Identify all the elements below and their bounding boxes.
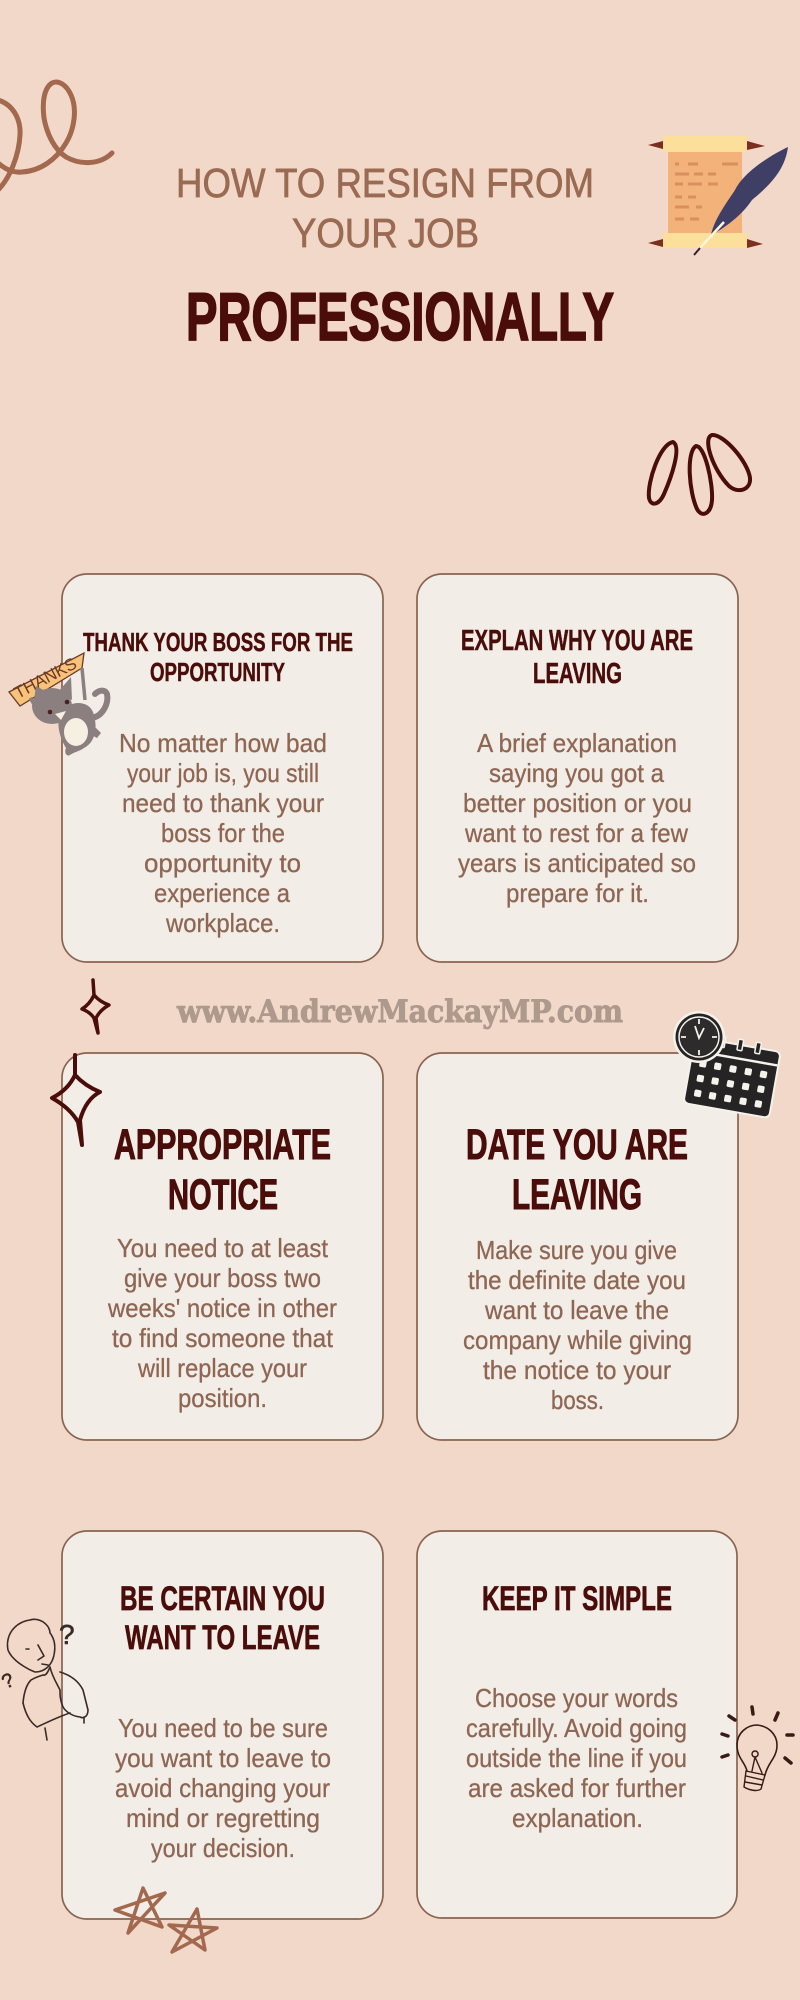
decorative small sparkle <box>82 980 109 1033</box>
body text: be certain <box>115 1713 331 1863</box>
title: HOW TO RESIGN FROM <box>176 160 594 206</box>
body text: keep it simple: are asked for further <box>468 1773 686 1803</box>
body text: keep it simple: explanation. <box>512 1803 643 1833</box>
body text: appropriate notice: You need to at least <box>117 1233 329 1263</box>
icon: cat holding thanks banner <box>9 653 107 755</box>
body text: thank your boss: experience a <box>154 878 290 908</box>
icon: clock and calendar <box>673 1011 783 1119</box>
decorative large sparkle <box>52 1055 100 1145</box>
body text: thank your boss: your job is, you still <box>127 758 319 788</box>
body text: date you are leaving: boss. <box>551 1385 604 1415</box>
body text: appropriate notice: give your boss two <box>124 1263 321 1293</box>
heading: thank your boss <box>83 627 353 687</box>
body text: appropriate notice: position. <box>178 1383 267 1413</box>
body text: be certain: You need to be sure <box>118 1713 328 1743</box>
heading: appropriate notice <box>114 1121 331 1219</box>
title emphasis: professionally: PROFESSIONALLY <box>186 279 614 355</box>
heading: appropriate notice: NOTICE <box>168 1171 278 1219</box>
panel: keep it simple <box>417 1531 737 1918</box>
decorative squiggle top left <box>0 82 112 190</box>
heading: thank your boss: THANK YOUR BOSS FOR THE <box>83 627 353 657</box>
panel: be certain you want to leave <box>62 1531 383 1919</box>
body text: be certain: avoid changing your <box>115 1773 330 1803</box>
icon: thinking man with question marks: ? <box>59 1619 75 1650</box>
body text: thank your boss: No matter how bad <box>119 728 327 758</box>
body text: appropriate notice: will replace your <box>137 1353 307 1383</box>
body text: keep it simple: carefully. Avoid going <box>466 1713 687 1743</box>
heading: explain why: LEAVING <box>533 658 622 690</box>
body text: explain why: better position or you <box>463 788 692 818</box>
icon: cat holding thanks banner: THANKS <box>11 654 80 703</box>
heading: appropriate notice: APPROPRIATE <box>114 1121 331 1169</box>
heading: explain why: EXPLAN WHY YOU ARE <box>461 625 693 657</box>
body text: thank your boss: workplace. <box>165 908 280 938</box>
body text: date you are leaving: the notice to your <box>483 1355 671 1385</box>
heading: explain why <box>461 625 693 690</box>
heading: be certain: WANT TO LEAVE <box>125 1619 320 1657</box>
body text: explain why: saying you got a <box>489 758 664 788</box>
body text: be certain: mind or regretting <box>126 1803 320 1833</box>
body text: explain why: A brief explanation <box>477 728 677 758</box>
title: YOUR JOB <box>292 210 479 256</box>
heading: be certain <box>120 1580 325 1657</box>
panel: explain why you are leaving <box>417 574 738 962</box>
body text: be certain: you want to leave to <box>115 1743 331 1773</box>
panel: appropriate notice <box>62 1053 383 1440</box>
icon: scroll and feather quill <box>648 136 788 255</box>
body text: keep it simple: outside the line if you <box>466 1743 687 1773</box>
heading: keep it simple: KEEP IT SIMPLE <box>482 1580 672 1618</box>
icon: thinking man with question marks <box>0 1619 88 1740</box>
heading: thank your boss: OPPORTUNITY <box>150 657 285 687</box>
heading: date you are leaving: LEAVING <box>512 1171 642 1219</box>
body text: thank your boss <box>119 728 327 938</box>
heading: date you are leaving <box>466 1121 688 1219</box>
body text: thank your boss: opportunity to <box>144 848 301 878</box>
decorative leaves <box>649 435 750 514</box>
watermark url: www.AndrewMackayMP.com <box>176 994 623 1030</box>
body text: explain why: years is anticipated so <box>458 848 696 878</box>
body text: date you are leaving: company while giving <box>463 1325 692 1355</box>
panel: date you are leaving <box>417 1053 738 1440</box>
decorative stars <box>115 1888 217 1952</box>
body text: keep it simple <box>466 1683 687 1833</box>
body text: date you are leaving <box>463 1235 692 1415</box>
panel: thank your boss <box>62 574 383 962</box>
body text: appropriate notice <box>107 1233 337 1413</box>
body text: thank your boss: boss for the <box>161 818 285 848</box>
body text: explain why: prepare for it. <box>506 878 649 908</box>
body text: date you are leaving: Make sure you give <box>476 1235 677 1265</box>
title <box>176 160 594 256</box>
heading: date you are leaving: DATE YOU ARE <box>466 1121 688 1169</box>
icon: light bulb <box>722 1707 793 1790</box>
body text: appropriate notice: to find someone that <box>112 1323 334 1353</box>
body text: date you are leaving: want to leave the <box>484 1295 669 1325</box>
body text: be certain: your decision. <box>151 1833 295 1863</box>
body text: keep it simple: Choose your words <box>475 1683 678 1713</box>
body text: explain why <box>458 728 696 908</box>
heading: be certain: BE CERTAIN YOU <box>120 1580 325 1618</box>
body text: thank your boss: need to thank your <box>122 788 324 818</box>
body text: explain why: want to rest for a few <box>464 818 688 848</box>
body text: date you are leaving: the definite date you <box>468 1265 686 1295</box>
body text: appropriate notice: weeks' notice in other <box>107 1293 337 1323</box>
